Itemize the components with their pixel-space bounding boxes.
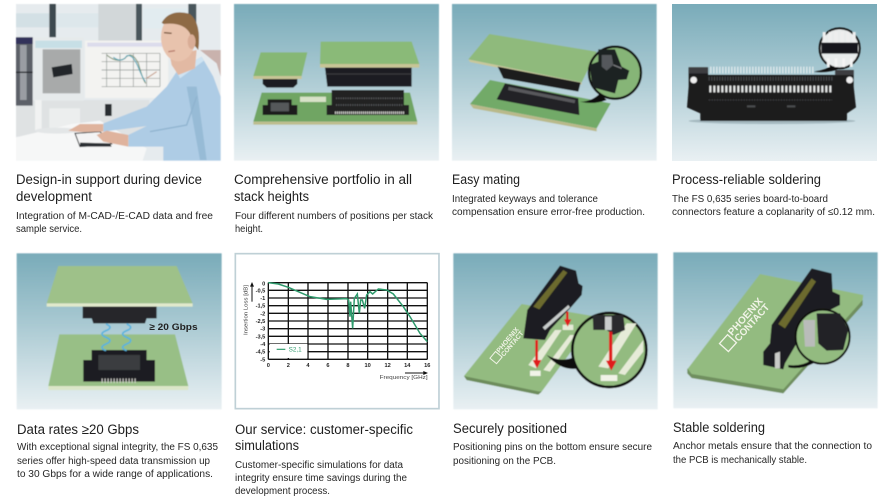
card: easy mating [452,4,657,218]
chart legend [270,344,307,358]
y axis tick labels: -0,5 [256,288,265,294]
y axis tick labels: -2 [260,311,265,317]
description: Customer-specific simulations for data [235,460,403,471]
heading [234,172,412,204]
heading [235,422,413,453]
logo on PCB [489,326,526,366]
description: connectors feature a coplanarity of ≤0.12 mm. [672,207,875,218]
description [672,194,875,218]
x axis tick labels: 8 [346,363,350,369]
description: height. [235,224,263,235]
card: data rates [17,253,222,480]
x axis tick labels: 0 [267,363,270,369]
y axis tick labels: -2,5 [256,319,265,325]
card: process-reliable soldering [672,4,877,218]
description [452,194,645,218]
description: sample service. [16,224,82,235]
description: compensation ensure error-free production. [452,207,645,218]
y axis tick labels: 0 [262,281,265,287]
image: connector with pin magnifier [672,4,877,161]
heading: Easy mating [452,172,520,187]
description: to 30 Gbps for a wide range of applications. [17,469,213,480]
description: Integration of M-CAD-/E-CAD data and free [16,211,213,222]
heading: simulations [235,438,299,453]
description: Anchor metals ensure that the connection to [673,441,872,452]
heading: stack heights [234,189,309,204]
card: securely positioned [453,253,658,467]
description: Integrated keyways and tolerance [452,194,598,205]
y axis title and arrow: Insertion Loss [dB] [243,285,249,335]
x axis title and arrow: Frequency [GHz] [380,375,428,381]
description [235,460,407,497]
heading: Stable soldering [673,420,765,435]
description [453,442,652,467]
heading [16,172,202,204]
photo: engineer at workstation [16,4,221,161]
card: design-in support [16,4,221,235]
y axis tick labels: -3,5 [256,334,265,340]
y axis title and arrow [243,282,254,335]
card: stable soldering [673,252,878,466]
heading: Securely positioned [453,421,567,436]
description: Four different numbers of positions per stack [235,211,434,222]
description: series offer high-speed data transmission up [17,456,210,467]
description [235,211,434,235]
y axis tick labels: -1 [260,296,265,302]
logo on PCB: CONTACT [500,330,525,358]
description: positioning on the PCB. [453,456,556,467]
y axis tick labels: -4 [260,342,266,348]
heading: development [16,189,92,204]
x axis title and arrow [380,371,428,381]
image: positioning pins on PCB [453,253,658,409]
description: the PCB is mechanically stable. [673,455,807,466]
y axis tick labels: -1,5 [256,304,265,310]
logo on PCB [717,296,772,355]
chart: insertion loss vs frequency [235,254,439,409]
description [16,211,213,235]
y axis tick labels: -3 [260,327,265,333]
description: development process. [235,486,330,497]
x axis tick labels: 10 [365,363,371,369]
y axis tick labels: -4,5 [256,350,265,356]
description: The FS 0,635 series board-to-board [672,194,828,205]
image: connector stack heights [234,4,439,161]
description [17,442,218,480]
chart legend: S2,1 [289,346,302,353]
description: Positioning pins on the bottom ensure secure [453,442,652,453]
heading: Comprehensive portfolio in all [234,172,412,187]
description: With exceptional signal integrity, the FS 0,635 [17,442,218,453]
description: integrity ensure time savings during the [235,473,407,484]
x axis tick labels: 16 [424,363,430,369]
x axis tick labels: 4 [306,363,310,369]
y axis tick labels [256,281,266,363]
card: customer-specific simulations [235,254,439,497]
image: anchor metals on PCB [673,252,878,408]
x axis tick labels: 14 [404,363,411,369]
heading: Process-reliable soldering [672,172,821,187]
x axis tick labels: 2 [287,363,290,369]
label: 20 Gbps: ≥ 20 Gbps [149,322,198,332]
logo on PCB: CONTACT [733,302,772,344]
heading: Design-in support during device [16,172,202,187]
image: mating connectors with keyway magnifier [452,4,657,161]
heading: Data rates ≥20 Gbps [17,422,139,437]
x axis tick labels: 6 [326,363,330,369]
image: signal between connectors [17,253,222,409]
logo on PCB: PHOENIX [496,326,521,354]
y axis tick labels: -5 [260,357,265,363]
description [673,441,872,466]
logo on PCB: PHOENIX [726,296,766,338]
card: comprehensive portfolio [234,4,439,235]
heading: Our service: customer-specific [235,422,413,437]
x axis tick labels: 12 [385,363,391,369]
x axis tick labels [267,363,430,369]
